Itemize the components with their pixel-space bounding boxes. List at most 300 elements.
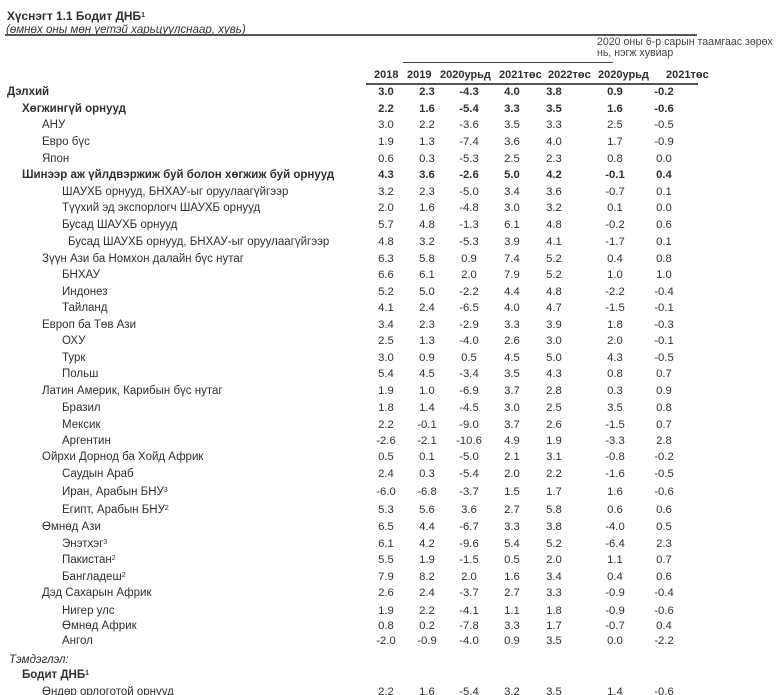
row: Индонез: -0.4 [654,286,674,298]
row: Дэд Сахарын Африк: 2.7 [504,587,520,599]
row: Япон [42,153,672,165]
row: Европ ба Төв Ази: 3.4 [378,319,394,331]
row: Зүүн Ази ба Номхон далайн бүс нутаг: 5.8 [419,253,435,265]
row: Зүүн Ази ба Номхон далайн бүс нутаг: 0.4 [607,253,623,265]
column headers: 2020урьд [598,69,649,81]
row: Иран, Арабын БНУ: -6.8 [417,486,437,498]
row: Латин Америк, Карибын бүс нутаг: -6.9 [459,385,479,397]
row: Хөгжингүй орнууд: 1.6 [419,103,435,115]
row: Хөгжингүй орнууд: 2.2 [378,103,394,115]
row: Египт, Арабын БНУ: Египт, Арабын БНУ2 [62,504,169,516]
row: Тайланд: 4.7 [546,302,562,314]
row: Түүхий эд экспорлогч: 3.0 [504,202,520,214]
row: Пакистан: -1.5 [459,554,479,566]
row: Ойрхи Дорнод ба Хойд Африк: 0.5 [378,451,394,463]
row: Тайланд: 4.1 [378,302,394,314]
row: Аргентин: 2.8 [656,435,672,447]
row: АНУ: -3.6 [459,119,479,131]
row: Пакистан: 1.1 [607,554,623,566]
row: ОХУ: 1.3 [419,335,435,347]
row: Польш: 0.7 [656,368,672,380]
row: Өндөр орлоготой орнууд [0,685,700,695]
row: Ангол [62,635,674,647]
row: Зүүн Ази ба Номхон далайн бүс нутаг: 6.3 [378,253,394,265]
row: Хөгжингүй орнууд: 1.6 [607,103,623,115]
row: Хөгжингүй орнууд [22,103,674,115]
row: БНХАУ: 2.0 [461,269,477,281]
row: Аргентин: -2.1 [417,435,437,447]
row: Өмнөд Африк [62,620,672,632]
row: Тайланд: -0.1 [654,302,674,314]
row: Ойрхи Дорнод ба Хойд Африк: -0.8 [605,451,625,463]
row: Өмнөд Ази: 3.8 [546,521,562,533]
row: Өмнөд Ази [42,521,672,533]
row: Бразил: 0.8 [656,402,672,414]
row: Хөгжингүй орнууд: 3.3 [504,103,520,115]
row: Бразил: 1.4 [419,402,435,414]
row: Латин Америк, Карибын бүс нутаг: 0.9 [656,385,672,397]
row: Турк: 0.5 [461,352,477,364]
row: Иран, Арабын БНУ: Иран, Арабын БНУ3 [62,486,168,498]
row: Дэд Сахарын Африк: -0.9 [605,587,625,599]
row: Саудын Араб: Саудын Араб [62,468,134,480]
row: Дэлхий: 0.9 [607,86,623,98]
row: Өмнөд Ази: 3.3 [504,521,520,533]
row: БНХАУ: 1.0 [656,269,672,281]
row: Ойрхи Дорнод ба Хойд Африк: -5.0 [459,451,479,463]
row: Шинээр аж үйлдвэржиж буй: -0.1 [605,169,625,181]
row: Ангол: 0.9 [504,635,520,647]
row: Япон: 2.3 [546,153,562,165]
row: Өмнөд Африк: -7.8 [459,620,479,632]
row: Турк: Турк [62,352,85,364]
row: Зүүн Ази ба Номхон далайн бүс нутаг: 5.2 [546,253,562,265]
row: Нигер улс: Нигер улс [62,605,115,617]
row: Аргентин: 4.9 [504,435,520,447]
row: АНУ: 3.5 [504,119,520,131]
row: Польш: 4.3 [546,368,562,380]
row: Дэлхий: 3.0 [378,86,394,98]
row: ШАУХБ орнууд: ШАУХБ орнууд, БНХАУ-ыг оруулаагүйгээр [62,186,288,198]
row: Египт, Арабын БНУ: 2.7 [504,504,520,516]
row: Өмнөд Ази: -6.7 [459,521,479,533]
column group note [597,36,773,59]
row: Япон: 0.0 [656,153,672,165]
row: Бусад ШАУХБ, БНХАУ-ыг оруулаагүй: 3.9 [504,236,520,248]
row: Өмнөд Ази: 6.5 [378,521,394,533]
row: Индонез: 5.2 [378,286,394,298]
subtitle: (өмнөх оны мөн үетэй харьцуулснаар, хувь) [6,24,246,36]
row: Шинээр аж үйлдвэржиж буй: 4.3 [378,169,394,181]
row: Өмнөд Африк: -0.7 [605,620,625,632]
row: БНХАУ: 7.9 [504,269,520,281]
row: Польш: 0.8 [607,368,623,380]
row: Иран, Арабын БНУ: -0.6 [654,486,674,498]
memo heading: Тэмдэглэл: [9,654,69,666]
row: Латин Америк, Карибын бүс нутаг [42,384,672,397]
row: Бусад ШАУХБ, БНХАУ-ыг оруулаагүй: -5.3 [459,236,479,248]
row: Тайланд: 4.0 [504,302,520,314]
row: Европ ба Төв Ази: 3.3 [504,319,520,331]
row: Евро бүс [42,136,674,148]
row: Польш: -3.4 [459,368,479,380]
column headers: 2018 [374,69,398,81]
row: Индонез: -2.2 [459,286,479,298]
row: Саудын Араб: 0.3 [419,468,435,480]
row: Индонез: 4.4 [504,286,520,298]
row: Мексик: 2.2 [378,419,394,431]
row: Ангол: 3.5 [546,635,562,647]
row: Өмнөд Ази: -4.0 [605,521,625,533]
row: Ангол: -0.9 [417,635,437,647]
row: Индонез [62,286,674,298]
row: Индонез: -2.2 [605,286,625,298]
row: Мексик: 3.7 [504,419,520,431]
row: Бусад ШАУХБ, БНХАУ-ыг оруулаагүй: Бусад ШАУХБ орнууд, БНХАУ-ыг оруулаагүйгээр [68,236,329,248]
row: Латин Америк, Карибын бүс нутаг: 1.0 [419,385,435,397]
row: Евро бүс: 3.6 [504,136,520,148]
row: Иран, Арабын БНУ [62,486,674,498]
row: Бангладеш: Бангладеш2 [62,571,126,583]
row: Зүүн Ази ба Номхон далайн бүс нутаг [42,252,672,265]
row: Ойрхи Дорнод ба Хойд Африк: 2.1 [504,451,520,463]
row: БНХАУ: 1.0 [607,269,623,281]
row: Бангладеш: 1.6 [504,571,520,583]
row: Латин Америк, Карибын бүс нутаг: 3.7 [504,385,520,397]
row: Өмнөд Ази: 4.4 [419,521,435,533]
row: Турк: 4.3 [607,352,623,364]
row: Дэлхий: Дэлхий [7,86,49,98]
row: Өмнөд Африк: 0.4 [656,620,672,632]
row: Аргентин: 1.9 [546,435,562,447]
row: Мексик: -0.1 [417,419,437,431]
row: Пакистан [62,554,672,566]
row: Бангладеш: 2.0 [461,571,477,583]
row: Япон: 0.8 [607,153,623,165]
row: АНУ: АНУ [42,119,65,131]
row: Бангладеш: 7.9 [378,571,394,583]
row: ОХУ: 2.6 [504,335,520,347]
row: Бангладеш: 0.6 [656,571,672,583]
row: Бангладеш: 0.4 [607,571,623,583]
column headers: 2021төс [499,69,542,81]
row: Бусад ШАУХБ орнууд: 4.8 [546,219,562,231]
row: Зүүн Ази ба Номхон далайн бүс нутаг: 0.9 [461,253,477,265]
row: Нигер улс: 1.8 [546,605,562,617]
row: Ойрхи Дорнод ба Хойд Африк: Ойрхи Дорнод ба Хойд Африк [42,451,203,463]
row: Турк: -0.5 [654,352,674,364]
row: Индонез: Индонез [62,286,108,298]
row: Дэлхий: -0.2 [654,86,674,98]
row: Саудын Араб: 2.4 [378,468,394,480]
row: Европ ба Төв Ази: -0.3 [654,319,674,331]
row: ОХУ: 2.0 [607,335,623,347]
row: Евро бүс: 1.3 [419,136,435,148]
row: ШАУХБ орнууд: 2.3 [419,186,435,198]
row: Египт, Арабын БНУ: 5.3 [378,504,394,516]
column headers [366,69,709,85]
row: Бусад ШАУХБ орнууд: -1.3 [459,219,479,231]
row: Пакистан: 0.7 [656,554,672,566]
row: Нигер улс: -0.6 [654,605,674,617]
row: Түүхий эд экспорлогч: 0.1 [607,202,623,214]
row: Дэлхий [7,86,674,98]
row: Зүүн Ази ба Номхон далайн бүс нутаг: 7.4 [504,253,520,265]
row: Дэд Сахарын Африк: 2.4 [419,587,435,599]
row: Шинээр аж үйлдвэржиж буй [22,169,672,181]
row: Иран, Арабын БНУ: 1.5 [504,486,520,498]
row: Түүхий эд экспорлогч: -4.8 [459,202,479,214]
row: Саудын Араб: 2.0 [504,468,520,480]
row: Евро бүс: -7.4 [459,136,479,148]
row: АНУ: 2.5 [607,119,623,131]
row: Хөгжингүй орнууд: 3.5 [546,103,562,115]
row: Ангол: -2.0 [376,635,396,647]
row: Польш: Польш [62,368,98,380]
row: Бусад ШАУХБ, БНХАУ-ыг оруулаагүй: 3.2 [419,236,435,248]
memo subheading: Бодит ДНБ: Бодит ДНБ1 [22,669,89,681]
row: Иран, Арабын БНУ: 1.7 [546,486,562,498]
row: Бусад ШАУХБ, БНХАУ-ыг оруулаагүй: -1.7 [605,236,625,248]
row: Польш: 4.5 [419,368,435,380]
row: Тайланд: -6.5 [459,302,479,314]
row: БНХАУ [62,269,672,281]
row: Индонез: 5.0 [419,286,435,298]
row: Ойрхи Дорнод ба Хойд Африк: 0.1 [419,451,435,463]
row: Египт, Арабын БНУ: 5.6 [419,504,435,516]
row: Энэтхэг: 2.3 [656,538,672,550]
row: Түүхий эд экспорлогч: 3.2 [546,202,562,214]
row: Япон: -5.3 [459,153,479,165]
row: Ойрхи Дорнод ба Хойд Африк: 3.1 [546,451,562,463]
row: Энэтхэг: 5.4 [504,538,520,550]
row: Түүхий эд экспорлогч: Түүхий эд экспорлогч ШАУХБ орнууд [62,202,260,214]
row: Египт, Арабын БНУ: 5.8 [546,504,562,516]
row: Мексик: -9.0 [459,419,479,431]
row: БНХАУ: БНХАУ [62,269,100,281]
row: Мексик: -1.5 [605,419,625,431]
row: Япон: 0.3 [419,153,435,165]
row: Түүхий эд экспорлогч: 0.0 [656,202,672,214]
row: Шинээр аж үйлдвэржиж буй: Шинээр аж үйлдвэржиж буй болон хөгжиж буй орнууд [22,169,334,181]
row: БНХАУ: 6.1 [419,269,435,281]
row: Мексик: 0.7 [656,419,672,431]
row: Аргентин: -2.6 [376,435,396,447]
row: Өмнөд Ази: 0.5 [656,521,672,533]
row: Өмнөд Африк: 0.2 [419,620,435,632]
row: Евро бүс: 1.7 [607,136,623,148]
data table [7,86,674,695]
row: ОХУ: ОХУ [62,335,85,347]
row: Түүхий эд экспорлогч [62,202,672,214]
row: Бусад ШАУХБ орнууд [62,219,672,231]
row: ШАУХБ орнууд: 3.4 [504,186,520,198]
row: Өмнөд Африк: 0.8 [378,620,394,632]
column group note: 2020 оны 6-р сарын таамгаас зөрөх [597,36,773,48]
row: Евро бүс: -0.9 [654,136,674,148]
row: Бусад ШАУХБ орнууд: 6.1 [504,219,520,231]
row: Иран, Арабын БНУ: -3.7 [459,486,479,498]
column headers: 2021төс [666,69,709,81]
row: Аргентин: Аргентин [62,435,111,447]
row: Бусад ШАУХБ орнууд: 0.6 [656,219,672,231]
row: ШАУХБ орнууд: 0.1 [656,186,672,198]
row: Турк: 3.0 [378,352,394,364]
row: БНХАУ: 5.2 [546,269,562,281]
row: Польш: 3.5 [504,368,520,380]
row: Египт, Арабын БНУ: 0.6 [607,504,623,516]
row: ШАУХБ орнууд [62,186,672,198]
row: Хөгжингүй орнууд: -0.6 [654,103,674,115]
row: Өмнөд Африк: 3.3 [504,620,520,632]
row: Египт, Арабын БНУ: 3.6 [461,504,477,516]
row: Япон: 0.6 [378,153,394,165]
row: Шинээр аж үйлдвэржиж буй: -2.6 [459,169,479,181]
row: БНХАУ: 6.6 [378,269,394,281]
row: Бусад ШАУХБ орнууд: 5.7 [378,219,394,231]
row: Дэд Сахарын Африк: -0.4 [654,587,674,599]
row: Саудын Араб: -1.6 [605,468,625,480]
row: Нигер улс: 1.1 [504,605,520,617]
row: Саудын Араб: -5.4 [459,468,479,480]
row: Турк: 4.5 [504,352,520,364]
row: Европ ба Төв Ази: Европ ба Төв Ази [42,319,136,331]
row: ШАУХБ орнууд: 3.2 [378,186,394,198]
row: Ангол: Ангол [62,635,93,647]
row: Нигер улс [62,605,674,617]
row: ОХУ: 3.0 [546,335,562,347]
row: Мексик: 2.6 [546,419,562,431]
column headers: 2022төс [548,69,591,81]
row: Энэтхэг: 4.2 [419,538,435,550]
row: Бразил [62,402,672,414]
row: Нигер улс: -0.9 [605,605,625,617]
row: Бусад ШАУХБ орнууд: -0.2 [605,219,625,231]
row: Евро бүс: 4.0 [546,136,562,148]
row: Европ ба Төв Ази: 2.3 [419,319,435,331]
row: Шинээр аж үйлдвэржиж буй: 3.6 [419,169,435,181]
row: Бразил: 3.5 [607,402,623,414]
row: Бразил: 3.0 [504,402,520,414]
row: Дэд Сахарын Африк: 3.3 [546,587,562,599]
row: Энэтхэг: 5.2 [546,538,562,550]
row: Турк [62,352,674,364]
row: Мексик: Мексик [62,419,100,431]
row: Дэлхий: -4.3 [459,86,479,98]
row: Ойрхи Дорнод ба Хойд Африк: -0.2 [654,451,674,463]
row: Ангол: 0.0 [607,635,623,647]
row: Пакистан: 1.9 [419,554,435,566]
row: Иран, Арабын БНУ: -6.0 [376,486,396,498]
row: Дэд Сахарын Африк [42,587,674,599]
row: Бангладеш: 8.2 [419,571,435,583]
row: Дэд Сахарын Африк: 2.6 [378,587,394,599]
row: Энэтхэг: Энэтхэг3 [62,538,107,550]
row: Шинээр аж үйлдвэржиж буй: 0.4 [656,169,672,181]
row: ОХУ: -0.1 [654,335,674,347]
row: Хөгжингүй орнууд: -5.4 [459,103,479,115]
row: Европ ба Төв Ази: -2.9 [459,319,479,331]
row: Пакистан: 2.0 [546,554,562,566]
row: Пакистан: 0.5 [504,554,520,566]
row: Бангладеш [62,571,672,583]
row: Дэлхий: 2.3 [419,86,435,98]
row: Турк: 5.0 [546,352,562,364]
row: Дэлхий: 4.0 [504,86,520,98]
row: ОХУ: 2.5 [378,335,394,347]
row: Түүхий эд экспорлогч: 1.6 [419,202,435,214]
row: Индонез: 4.8 [546,286,562,298]
row: АНУ: 2.2 [419,119,435,131]
row: Энэтхэг: -9.6 [459,538,479,550]
row: Тайланд: Тайланд [62,302,108,314]
row: Аргентин: -3.3 [605,435,625,447]
row: Европ ба Төв Ази [42,318,674,331]
row: Нигер улс: 1.9 [378,605,394,617]
row: Ангол: -4.0 [459,635,479,647]
row: ОХУ [62,335,674,347]
row: Дэд Сахарын Африк: -3.7 [459,587,479,599]
row: Евро бүс: Евро бүс [42,136,90,148]
row: Египт, Арабын БНУ [62,504,672,516]
row: Бусад ШАУХБ, БНХАУ-ыг оруулаагүй: 0.1 [656,236,672,248]
row: Турк: 0.9 [419,352,435,364]
row: Бусад ШАУХБ орнууд: 4.8 [419,219,435,231]
row: Пакистан: Пакистан2 [62,554,116,566]
row: Европ ба Төв Ази: 3.9 [546,319,562,331]
row: Шинээр аж үйлдвэржиж буй: 4.2 [546,169,562,181]
row: Аргентин [62,435,672,447]
row: Өмнөд Африк: 1.7 [546,620,562,632]
row: ШАУХБ орнууд: 3.6 [546,186,562,198]
row: Латин Америк, Карибын бүс нутаг: 0.3 [607,385,623,397]
row: Бусад ШАУХБ, БНХАУ-ыг оруулаагүй [68,236,672,248]
row: АНУ [42,119,674,131]
row: Саудын Араб [62,468,674,480]
row: Саудын Араб: 2.2 [546,468,562,480]
row: Бразил: Бразил [62,402,101,414]
column group note: нь, нэгж хувиар [597,47,673,59]
row: Египт, Арабын БНУ: 0.6 [656,504,672,516]
row: Энэтхэг: 6.1 [378,538,394,550]
row: Иран, Арабын БНУ: 1.6 [607,486,623,498]
row: Саудын Араб: -0.5 [654,468,674,480]
row: Тайланд [62,302,674,314]
row: Польш: 5.4 [378,368,394,380]
row: Бусад ШАУХБ, БНХАУ-ыг оруулаагүй: 4.8 [378,236,394,248]
row: Япон: Япон [42,153,69,165]
row: АНУ: 3.3 [546,119,562,131]
row: Латин Америк, Карибын бүс нутаг: Латин Америк, Карибын бүс нутаг [42,385,223,397]
row: Бусад ШАУХБ орнууд: Бусад ШАУХБ орнууд [62,219,177,231]
row: ОХУ: -4.0 [459,335,479,347]
row: АНУ: -0.5 [654,119,674,131]
row: Ангол: -2.2 [654,635,674,647]
row: Энэтхэг: -6.4 [605,538,625,550]
row: Энэтхэг [62,538,672,550]
row: Дэд Сахарын Африк: Дэд Сахарын Африк [42,587,151,599]
row: Латин Америк, Карибын бүс нутаг: 1.9 [378,385,394,397]
row: Аргентин: -10.6 [456,435,482,447]
column headers: 2020урьд [440,69,491,81]
row: Нигер улс: 2.2 [419,605,435,617]
column headers: 2019 [407,69,431,81]
row: Шинээр аж үйлдвэржиж буй: 5.0 [504,169,520,181]
row: Япон: 2.5 [504,153,520,165]
row: Евро бүс: 1.9 [378,136,394,148]
row: Зүүн Ази ба Номхон далайн бүс нутаг: 0.8 [656,253,672,265]
row: Бразил: 2.5 [546,402,562,414]
